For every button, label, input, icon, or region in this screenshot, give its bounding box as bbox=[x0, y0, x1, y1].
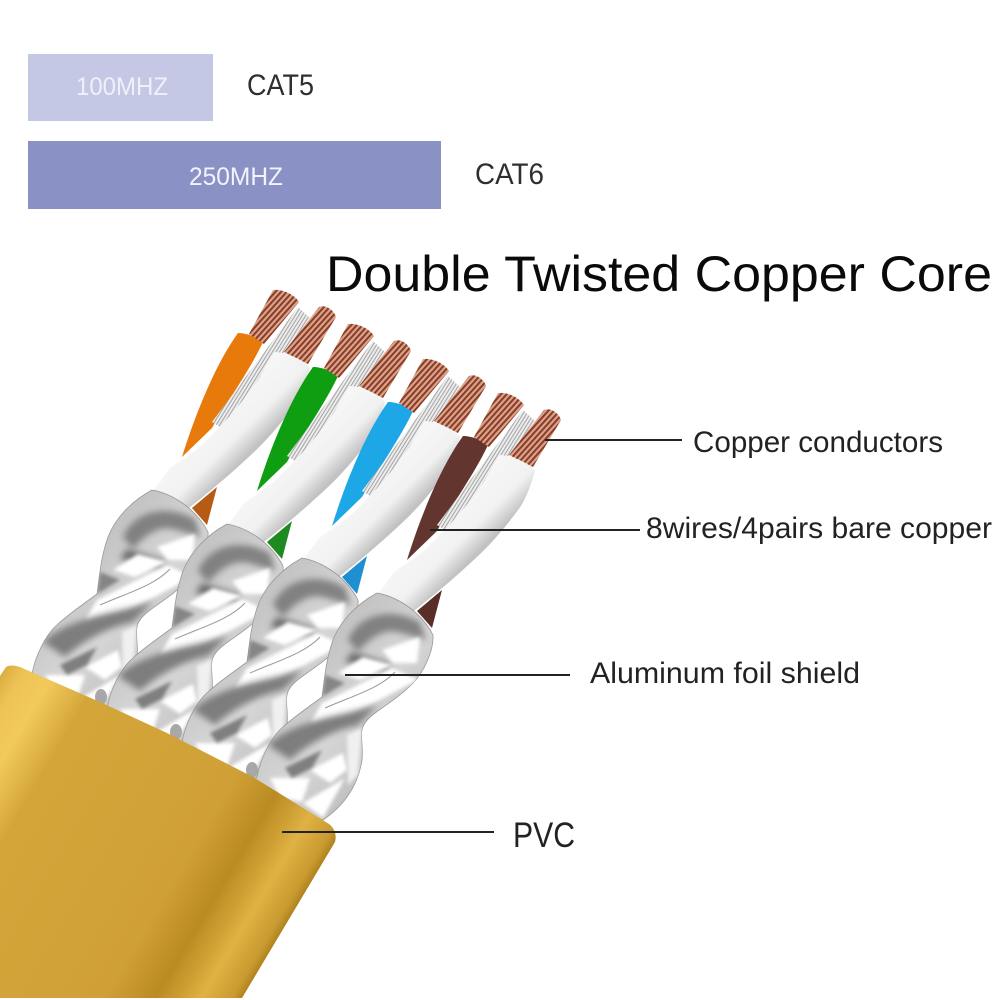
bar: 250MHz CAT6: CAT6 bbox=[475, 158, 544, 191]
wire pair 2: green and white bbox=[227, 324, 411, 559]
callout: 8 wires / 4 pairs: 8wires/4pairs bare copper bbox=[646, 512, 992, 545]
callout: aluminum foil shield: Aluminum foil shield bbox=[590, 657, 860, 690]
bar: 250MHz CAT6 bbox=[28, 141, 544, 209]
bar: 100MHz CAT5: CAT5 bbox=[247, 69, 314, 102]
callout: PVC: PVC bbox=[513, 816, 575, 855]
callout: copper conductors: Copper conductors bbox=[693, 426, 943, 459]
PVC jacket bbox=[0, 666, 336, 998]
bar: 100MHz CAT5 bbox=[28, 54, 314, 121]
wire pair 1: orange and white bbox=[15, 290, 336, 717]
wire pair 4: brown and white bbox=[377, 393, 561, 628]
bar: 100MHz CAT5: 100MHZ bbox=[76, 73, 168, 101]
knots between pairs bbox=[95, 689, 258, 778]
wire pair 3: blue and white bbox=[302, 359, 486, 594]
bar: 250MHz CAT6: 250MHZ bbox=[189, 163, 283, 191]
illustration: cable bbox=[0, 290, 561, 998]
title: Double Twisted Copper Core bbox=[326, 246, 992, 302]
